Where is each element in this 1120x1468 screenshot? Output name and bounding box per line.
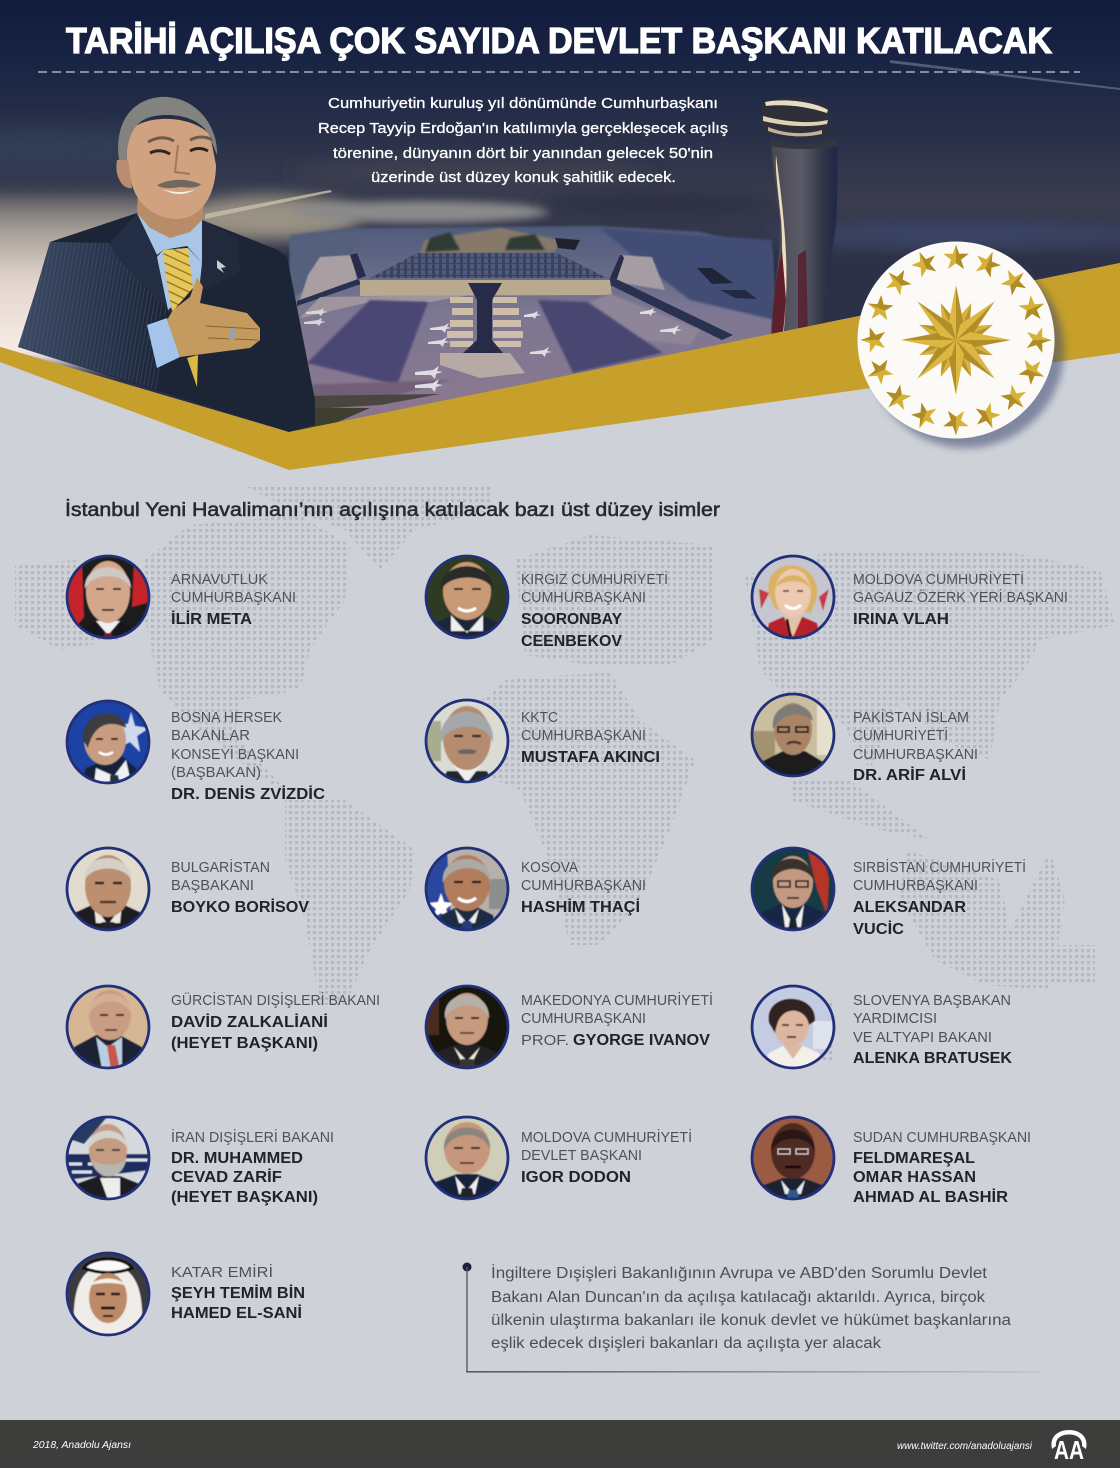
role and name: İRAN DIŞİŞLERİ BAKANI [171,1128,334,1146]
role and name: ALEKSANDAR [853,899,966,916]
role and name: DR. DENİS ZVİZDİC [171,785,325,803]
role and name: MOLDOVA CUMHURİYETİ [521,1128,692,1146]
role and name: DEVLET BAŞKANI [521,1147,642,1164]
role and name [521,570,668,650]
role and name: BAŞBAKANI [171,877,254,894]
role and name [171,1128,334,1206]
footer bar [0,1420,1120,1468]
role and name: BAKANLAR [171,727,250,744]
person: Alenka Bratusek [751,985,1012,1069]
role and name: PAKİSTAN İSLAM [853,708,969,726]
role and name [521,859,646,916]
role and name: CUMHURBAŞKANI [171,589,296,606]
callout frame [462,1262,1040,1373]
role and name: CEENBEKOV [521,633,622,650]
icon: Anadolu Agency logo: AA [1054,1435,1084,1465]
callout text: ülkenin ulaştırma bakanları ile konuk devlet ve hükümet başkanlarına [491,1312,1011,1329]
portrait [425,985,509,1069]
person: Temim bin Hamed el-Sani [66,1252,305,1336]
role and name: CUMHURBAŞKANI [853,877,978,894]
role and name: BULGARİSTAN [171,858,270,876]
portrait [66,555,150,639]
portrait [68,850,148,929]
dotted world map [15,486,1115,1060]
portrait [427,702,506,781]
section heading: İstanbul Yeni Havalimanı’nın açılışına katılacak bazı üst düzey isimler [65,500,721,521]
role and name: KONSEYİ BAŞKANI [171,745,299,763]
person: Ilir Meta [66,555,296,639]
tie [163,248,193,312]
role and name: ALENKA BRATUSEK [853,1050,1012,1067]
person: Sooronbay Ceenbekov [425,555,668,650]
person: Mustafa Akinci [425,699,660,783]
role and name [171,709,325,803]
role and name: OMAR HASSAN [853,1169,976,1186]
role and name: KOSOVA [521,859,578,876]
role and name [171,858,309,916]
role and name [521,709,660,766]
collar and shirt [137,213,202,263]
role and name: CUMHURBAŞKANI [521,1010,646,1027]
hand on chest [167,277,260,357]
role and name: AHMAD AL BASHİR [853,1188,1008,1206]
portrait [751,847,835,931]
person: David Zalkaliani [66,985,380,1071]
role and name: VUCİC [853,920,904,938]
role and name: SLOVENYA BAŞBAKAN [853,992,1011,1009]
jacket [18,213,315,432]
head [126,119,216,219]
role and name: GYORGE IVANOV [573,1032,710,1049]
intro paragraph: törenine, dünyanın dört bir yanından gelecek 50'nin [333,145,713,162]
person: Boyko Borisov [66,847,309,931]
person: Omar Hassan Ahmad Al Bashir [751,1116,1031,1206]
portrait [754,558,832,637]
portrait [425,847,509,931]
presidency emblem [858,242,1064,448]
role and name: MAKEDONYA CUMHURİYETİ [521,991,713,1009]
portrait [66,700,150,784]
portrait [66,1252,150,1336]
portrait [68,987,148,1066]
shirt cuff [147,318,180,368]
role and name [853,858,1026,938]
portrait [425,555,509,639]
person: Gyorge Ivanov [425,985,713,1069]
role and name: MUSTAFA AKINCI [521,749,660,766]
intro paragraph [318,95,728,186]
role and name: PROF. [521,1032,569,1049]
role and name: KIRGIZ CUMHURİYETİ [521,570,668,588]
airport [290,226,775,440]
role and name: BOSNA HERSEK [171,709,282,726]
role and name: HASHİM THAÇİ [521,898,640,916]
portrait [751,1116,835,1200]
role and name: (BAŞBAKAN) [171,764,261,781]
person: Irina Vlah [751,555,1068,639]
portrait of president [18,97,315,432]
portrait [428,1118,506,1198]
person: Denis Zvizdic [66,700,325,803]
footer link: www.twitter.com/anadoluajansi [897,1441,1033,1452]
role and name: KATAR EMİRİ [171,1263,273,1281]
role and name: DAVİD ZALKALİANİ [171,1013,328,1031]
callout text [491,1264,1011,1352]
role and name: ARNAVUTLUK [171,571,268,588]
role and name [171,991,380,1052]
role and name [171,1263,305,1322]
role and name: DR. ARİF ALVİ [853,766,966,784]
role and name: MOLDOVA CUMHURİYETİ [853,570,1024,588]
callout text: İngiltere Dışişleri Bakanlığının Avrupa ve ABD'den Sorumlu Devlet [491,1264,988,1282]
person: Igor Dodon [425,1116,692,1200]
role and name [521,1128,692,1186]
intro paragraph: üzerinde üst düzey konuk şahitlik edecek. [371,169,676,186]
role and name: GAGAUZ ÖZERK YERİ BAŞKANI [853,588,1068,606]
role and name: CUMHURİYETİ [853,726,948,744]
role and name: VE ALTYAPI BAKANI [853,1029,992,1046]
person: Arif Alvi [751,693,978,784]
role and name: (HEYET BAŞKANI) [171,1189,318,1206]
role and name: BOYKO BORİSOV [171,898,309,916]
callout text: Bakanı Alan Duncan'ın da açılışa katılacağı aktarıldı. Ayrıca, birçok [491,1289,985,1306]
role and name: İLİR META [171,610,252,628]
role and name: DR. MUHAMMED [171,1150,303,1167]
role and name: ŞEYH TEMİM BİN [171,1284,305,1302]
portrait [751,693,835,777]
role and name: (HEYET BAŞKANI) [171,1035,318,1052]
intro paragraph: Cumhuriyetin kuruluş yıl dönümünde Cumhurbaşkanı [328,95,718,112]
role and name: FELDMAREŞAL [853,1150,975,1167]
role and name: KKTC [521,709,558,726]
gold chevron band [0,263,1120,470]
control tower [761,98,838,345]
role and name [171,571,296,628]
role and name: SOORONBAY [521,611,622,628]
footer credit: 2018, Anadolu Ajansı [32,1440,131,1451]
role and name: HAMED EL-SANİ [171,1304,302,1322]
hero photo: sky, airport and tower [0,0,1120,440]
role and name: CUMHURBAŞKANI [853,746,978,763]
person: Hashim Thaci [425,847,646,931]
role and name: YARDIMCISI [853,1010,937,1027]
role and name: SUDAN CUMHURBAŞKANI [853,1129,1031,1146]
neck [137,190,205,250]
portrait [66,1116,150,1200]
role and name: CUMHURBAŞKANI [521,589,646,606]
callout text: eşlik edecek dışişleri bakanları da açılışta yer alacak [491,1335,881,1352]
role and name: CUMHURBAŞKANI [521,877,646,894]
role and name [853,570,1068,628]
role and name [521,991,713,1049]
role and name: CEVAD ZARİF [171,1168,282,1186]
note callout [462,1262,1040,1373]
portrait [754,988,832,1067]
role and name: CUMHURBAŞKANI [521,727,646,744]
role and name: IRINA VLAH [853,611,949,628]
role and name: SIRBİSTAN CUMHURİYETİ [853,858,1026,876]
title: TARİHİ AÇILIŞA ÇOK SAYIDA DEVLET BAŞKANI KATILACAK [66,20,1052,61]
role and name [853,1129,1031,1206]
role and name: IGOR DODON [521,1169,631,1186]
role and name [853,708,978,784]
intro paragraph: Recep Tayyip Erdoğan'ın katılımıyla gerçekleşecek açılış [318,120,728,137]
person: Aleksandar Vucic [751,847,1026,938]
person: Muhammed Cevad Zarif [66,1116,334,1206]
role and name [853,992,1012,1067]
role and name: GÜRCİSTAN DIŞİŞLERİ BAKANI [171,991,380,1009]
